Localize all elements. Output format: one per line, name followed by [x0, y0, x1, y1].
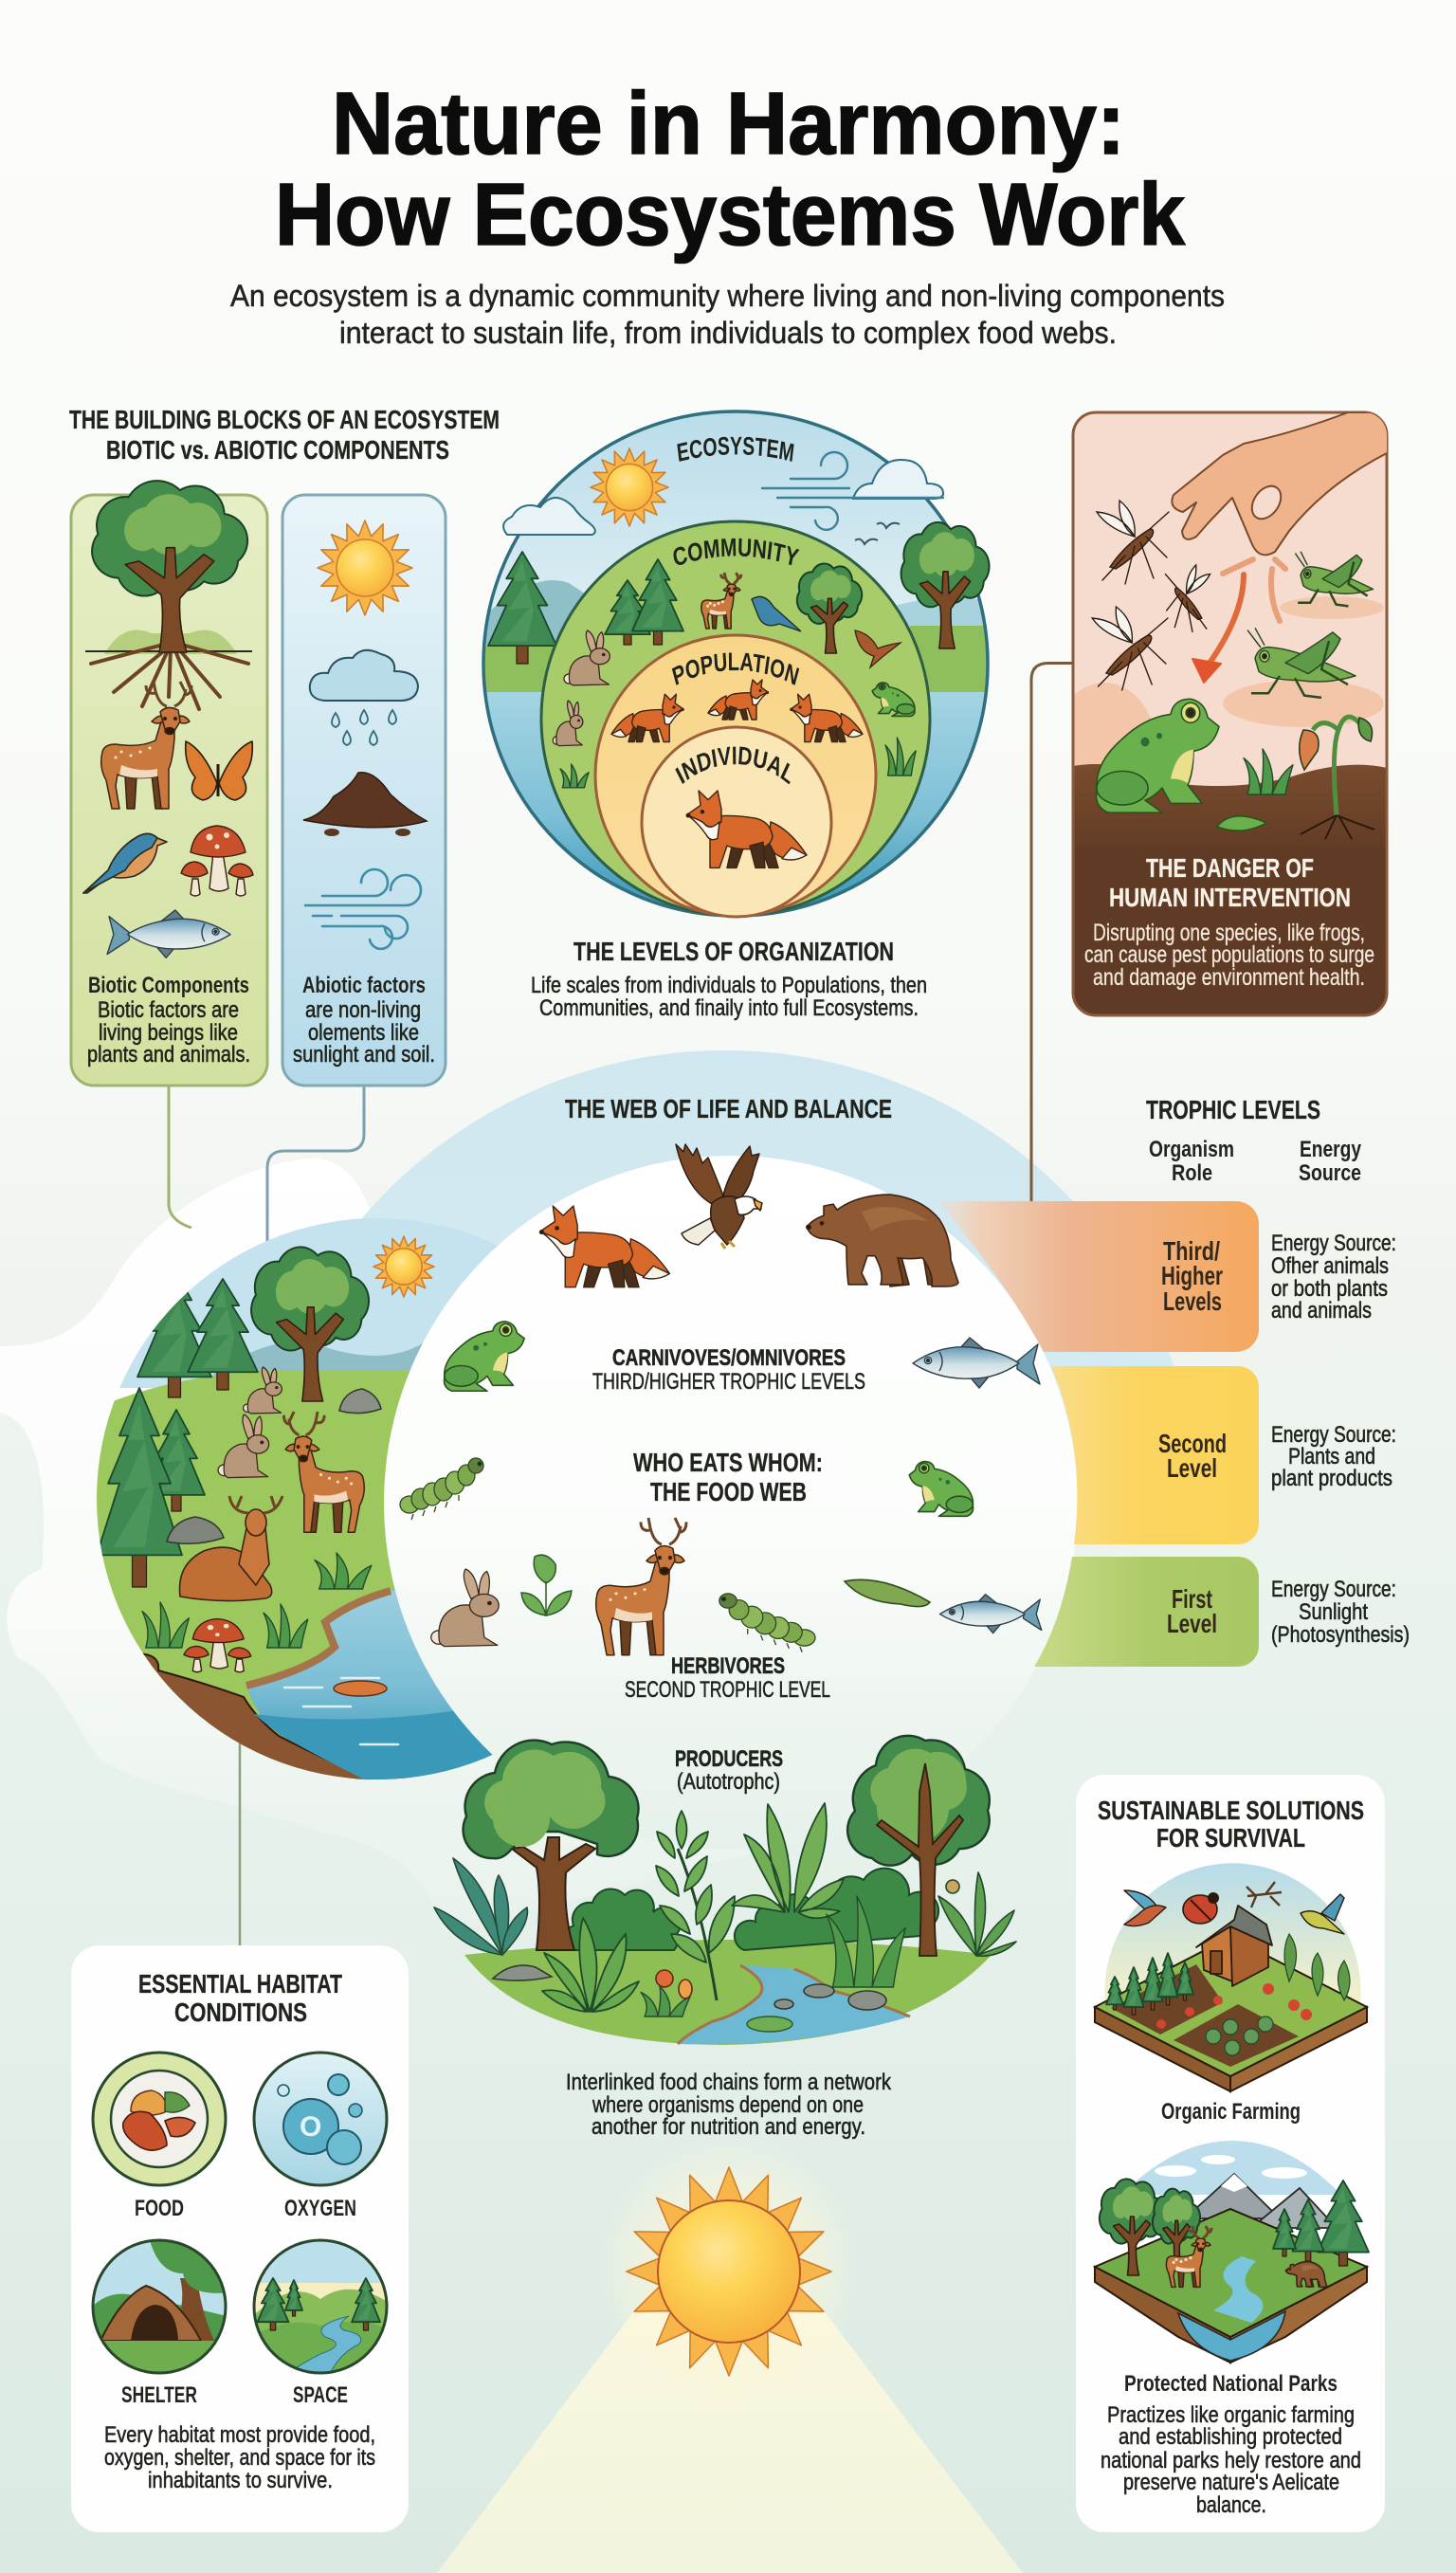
bar: first level: First [1172, 1584, 1212, 1614]
heading: solutions: SUSTAINABLE SOLUTIONS [1098, 1796, 1364, 1825]
icon: center leaf plant [656, 1811, 735, 2000]
icon: left leaves [434, 1858, 527, 1955]
text: second level energy: Energy Source: [1271, 1422, 1396, 1448]
icon: small rabbit [244, 1367, 282, 1414]
icon: small plant [560, 764, 589, 788]
label: shelter: SHELTER [121, 2382, 197, 2408]
icon: reed [885, 738, 916, 776]
icon: butterfly [186, 741, 252, 800]
text: abiotic factors: Abiotic factors [302, 973, 426, 998]
text: who eats whom: WHO EATS WHOM: [633, 1448, 823, 1477]
text: biotic components: plants and animals. [87, 1042, 250, 1068]
heading: web of life: THE WEB OF LIFE AND BALANCE [565, 1094, 892, 1123]
background white cloud [0, 1159, 948, 1934]
icon: small frog [909, 1462, 974, 1516]
heading: building blocks: THE BUILDING BLOCKS OF AN ECOSYSTEM [69, 405, 500, 434]
panel: essential habitat conditions [71, 1945, 409, 2532]
text: habitat description: inhabitants to survive. [148, 2468, 333, 2493]
text: solutions description [1101, 2402, 1361, 2518]
connector: abiotic panel to web scene [267, 1086, 364, 1248]
icon: fox [686, 791, 807, 867]
text: interlinked food chains: Interlinked food chains form a network [566, 2070, 892, 2095]
text: solutions description: and establishing protected [1119, 2424, 1342, 2450]
text: biotic components: living beings like [99, 1020, 238, 1046]
sun beam [437, 2313, 1023, 2573]
text: habitat description [104, 2422, 375, 2493]
text: carnivores [592, 1345, 865, 1395]
bar: second level [1051, 1366, 1259, 1544]
icon: oak tree [251, 1247, 369, 1401]
icon: grass [315, 1553, 372, 1589]
column head: organism role [1149, 1137, 1234, 1186]
text: who eats whom [633, 1448, 823, 1506]
web of life arc [362, 1050, 1174, 1460]
text: danger title: THE DANGER OF [1146, 853, 1314, 883]
label: space: SPACE [293, 2382, 348, 2408]
icon: right tree [847, 1736, 990, 1956]
icon: bird [752, 596, 801, 631]
icon: pine [488, 552, 556, 664]
icon: birds [855, 523, 900, 544]
text: solutions description: Practizes like organic farming [1107, 2402, 1355, 2428]
panel: abiotic factors [282, 495, 446, 1086]
icon: mushrooms [181, 826, 253, 896]
title: How Ecosystems Work [275, 165, 1185, 264]
ring: ecosystem [474, 408, 1005, 920]
label: oxygen: OXYGEN [284, 2196, 356, 2221]
icon: deer [701, 573, 741, 629]
label: population: POPULATION [671, 652, 800, 685]
icon: river rocks [493, 1965, 886, 2010]
icon: barn [1196, 1906, 1272, 1986]
icon: small fish [940, 1595, 1042, 1633]
icons: background bushes [565, 1869, 938, 1950]
text: solutions description: national parks hely restore and [1101, 2448, 1361, 2473]
text: herbivores: HERBIVORES [671, 1653, 785, 1679]
text: levels of organization [531, 937, 927, 1021]
icon: food [93, 2053, 226, 2185]
heading: building blocks: BIOTIC vs. ABIOTIC COMPONENTS [106, 435, 449, 465]
text: abiotic factors [293, 973, 435, 1068]
text: levels of organization: Life scales from individuals to Populations, then [531, 973, 927, 998]
label: individual: INDIVIDUAL [675, 747, 791, 785]
icon: cloud left [503, 498, 595, 535]
label: protected national parks: Protected National Parks [1124, 2371, 1338, 2397]
icon: hand [1172, 412, 1389, 555]
heading: solutions: FOR SURVIVAL [1156, 1823, 1305, 1852]
text: third level energy: Ofher animals [1271, 1253, 1389, 1279]
icon: fox 2 [708, 680, 768, 720]
text: producers [675, 1746, 783, 1795]
icon: broad leaf plant [732, 1803, 844, 1918]
text: third level energy: Energy Source: [1271, 1231, 1396, 1256]
icon: frog [445, 1322, 524, 1391]
scene: ecosystem crescent [97, 1218, 498, 1779]
icon: fox 3 [791, 694, 863, 742]
text: solutions description: balance. [1196, 2492, 1266, 2518]
text: danger description: can cause pest populations to surge [1084, 941, 1374, 968]
icon: fox 1 [611, 694, 683, 742]
icon: sun [591, 448, 668, 526]
text: interlinked food chains [566, 2070, 892, 2140]
icon: tree with roots [85, 481, 252, 709]
icon: cloud right [853, 460, 943, 499]
heading: solutions [1098, 1796, 1364, 1852]
bar: second level: Level [1167, 1453, 1217, 1483]
text: habitat description: Every habitat most provide food, [104, 2422, 375, 2448]
icons: community pines [605, 559, 683, 645]
icon: mosquito 1 [1097, 501, 1169, 584]
icon: soil pile [303, 773, 427, 836]
text: biotic components [87, 973, 250, 1068]
text: habitat description: oxygen, shelter, and space for its [104, 2445, 375, 2471]
scene: producers [434, 1736, 1016, 2045]
icon: sun [318, 520, 412, 615]
icon: insect [1247, 1882, 1282, 1907]
icon: front plant [542, 1918, 639, 2012]
subtitle [230, 279, 1225, 350]
icon: shelter [92, 2239, 230, 2375]
food web [400, 1094, 1042, 1703]
title: Nature in Harmony: [332, 74, 1125, 173]
icon: tree [901, 522, 990, 648]
text: second level energy: Plants and [1288, 1444, 1375, 1469]
bar: third level: Higher [1161, 1261, 1223, 1290]
trophic levels chart [937, 1095, 1410, 1667]
ring: population [595, 635, 876, 916]
text: first level energy: Energy Source: [1271, 1577, 1396, 1602]
icon: water plant [827, 1896, 905, 1987]
icon: small rabbit [553, 701, 583, 746]
icon: eagle [676, 1144, 762, 1249]
icon: rain cloud [310, 650, 418, 745]
subtitle: interact to sustain life, from individuals to complex food webs. [339, 316, 1117, 350]
bar: first level: Level [1167, 1609, 1217, 1638]
icon: deer [101, 682, 191, 809]
text: third level energy [1271, 1231, 1396, 1323]
ring: community [541, 521, 930, 916]
icon: rabbit [218, 1414, 269, 1478]
text: producers: PRODUCERS [675, 1746, 783, 1772]
text: herbivores [625, 1653, 830, 1703]
white food web circle [384, 1156, 1078, 1850]
bar: third level [937, 1201, 1259, 1352]
icon: left tree [464, 1741, 639, 1950]
icon: grass [264, 1604, 308, 1648]
icon: deer [596, 1518, 686, 1655]
icon: flying bird [855, 630, 901, 667]
label: community: COMMUNITY [673, 538, 800, 565]
sun glow [596, 2139, 862, 2404]
icon: oxygen: O [300, 2111, 321, 2143]
illustration: national park [1095, 2141, 1369, 2363]
icon: bluebird [83, 833, 167, 893]
text: interlinked food chains: where organisms depend on one [592, 2092, 864, 2118]
text: herbivores: SECOND TROPHIC LEVEL [625, 1677, 830, 1703]
column head: organism role: Role [1172, 1160, 1212, 1186]
heading: habitat: ESSENTIAL HABITAT [138, 1969, 342, 1998]
label: ecosystem: ECOSYSTEM [677, 436, 794, 462]
icon: scene sun [373, 1236, 434, 1297]
label: food: FOOD [135, 2196, 184, 2221]
title [275, 74, 1185, 264]
icon: oxygen [254, 2053, 387, 2185]
icon: space [253, 2239, 388, 2374]
icon: grasshopper 1 [1295, 552, 1373, 606]
icon: mosquito 3 [1092, 607, 1168, 690]
icon: grass [1244, 749, 1293, 794]
text: abiotic factors: are non-living [305, 997, 421, 1023]
text: levels of organization: Communities, and finaily into full Ecosystems. [539, 995, 919, 1021]
connector: danger panel to trophic levels [1031, 664, 1073, 1201]
text: danger title: HUMAN INTERVENTION [1109, 883, 1351, 912]
icon: songbird [1301, 1894, 1344, 1934]
text: danger description: and damage environment health. [1093, 964, 1365, 991]
icon: rabbit [431, 1569, 499, 1647]
icon: leaf plant [521, 1555, 572, 1615]
bar: second level: Second [1158, 1429, 1227, 1458]
icon: flowers [641, 1970, 692, 2016]
icon: caterpillar [400, 1458, 483, 1520]
icon: fish [107, 910, 230, 958]
ring: individual [642, 727, 831, 917]
icon: frog [872, 683, 915, 716]
text: producers: (Autotrophc) [677, 1769, 780, 1795]
heading: trophic levels: TROPHIC LEVELS [1146, 1095, 1320, 1124]
text: interlinked food chains: another for nutrition and energy. [592, 2114, 865, 2140]
icon: tree [797, 564, 862, 653]
icon: hummingbird [1124, 1890, 1166, 1926]
panel: danger of human intervention [1052, 412, 1389, 1019]
icon: ladybug [1183, 1892, 1219, 1924]
icon: bear [807, 1195, 958, 1286]
arrow: falling effect [1192, 559, 1285, 683]
icon: upper pines [137, 1269, 258, 1397]
icon: mushrooms [184, 1619, 251, 1672]
icon: park bear [1285, 2262, 1327, 2287]
icon: rock [339, 1389, 381, 1414]
bar: third level: Levels [1163, 1286, 1222, 1316]
connector: biotic panel to web scene [169, 1086, 191, 1228]
icon: frog [1096, 699, 1219, 812]
text: solutions description: preserve nature's Aelicate [1123, 2470, 1339, 2495]
icon: big sun [627, 2167, 831, 2376]
text: third level energy: or both plants [1271, 1276, 1388, 1302]
icon: deer lying [180, 1496, 282, 1601]
habitat connector [239, 1735, 241, 1945]
icon: rabbit [564, 630, 610, 685]
bar: third level: Third/ [1163, 1236, 1220, 1266]
icon: plant [142, 1602, 189, 1648]
text: carnivores: THIRD/HIGHER TROPHIC LEVELS [592, 1369, 865, 1395]
icon: fallen leaf [1217, 816, 1266, 830]
bar: first level [1034, 1557, 1259, 1667]
label: organic farming: Organic Farming [1161, 2099, 1301, 2125]
text: carnivores: CARNIVOVES/OMNIVORES [612, 1345, 846, 1371]
icon: green caterpillar [719, 1594, 815, 1652]
text: biotic components: Biotic factors are [98, 997, 239, 1023]
column head: energy source: Source [1299, 1160, 1361, 1186]
icon: leaf insect [845, 1579, 930, 1607]
icon: big pines [97, 1388, 205, 1587]
heading: habitat: CONDITIONS [174, 1998, 307, 2027]
icon: salmon [913, 1338, 1040, 1388]
text: second level energy: plant products [1271, 1466, 1392, 1491]
column head: organism role: Organism [1149, 1137, 1234, 1162]
text: third level energy: and animals [1271, 1298, 1372, 1323]
icon: wind [305, 869, 421, 949]
column head: energy source [1299, 1137, 1362, 1186]
text: biotic components: Biotic Components [88, 973, 249, 998]
text: abiotic factors: olements like [308, 1020, 419, 1046]
text: danger description [1084, 920, 1374, 991]
illustration: organic farming [1095, 1863, 1367, 2091]
column head: energy source: Energy [1300, 1137, 1362, 1162]
icon: wind [762, 452, 943, 530]
heading: habitat [138, 1969, 342, 2027]
heading: building blocks [69, 405, 500, 465]
text: danger description: Disrupting one species, like frogs, [1093, 920, 1365, 946]
subtitle: An ecosystem is a dynamic community where living and non-living components [230, 279, 1225, 313]
icon: wilted plant [1300, 717, 1374, 839]
text: first level energy: (Photosynthesis) [1271, 1622, 1410, 1648]
icon: stream [678, 1965, 910, 2044]
text: second level energy [1271, 1422, 1396, 1491]
text: first level energy [1271, 1577, 1410, 1648]
text: levels of organization: THE LEVELS OF ORGANIZATION [573, 937, 894, 966]
icon: park deer [1166, 2226, 1211, 2287]
text: danger title [1109, 853, 1351, 912]
icon: floating log [334, 1681, 387, 1696]
icon: right grasses [938, 1872, 1016, 1956]
icon: mosquito 2 [1165, 565, 1210, 631]
panel: biotic components [71, 481, 267, 1086]
icon: grasshopper 2 [1247, 628, 1356, 698]
text: abiotic factors: sunlight and soil. [293, 1042, 435, 1068]
icon: fox [539, 1206, 669, 1287]
icon: deer standing [283, 1412, 364, 1532]
panel: sustainable solutions [1076, 1775, 1385, 2532]
chart: nested levels of organization [482, 410, 991, 918]
text: who eats whom: THE FOOD WEB [650, 1477, 807, 1506]
icon: lily pad [747, 2016, 792, 2032]
text: first level energy: Sunlight [1299, 1599, 1368, 1625]
icon: rock [167, 1517, 224, 1543]
